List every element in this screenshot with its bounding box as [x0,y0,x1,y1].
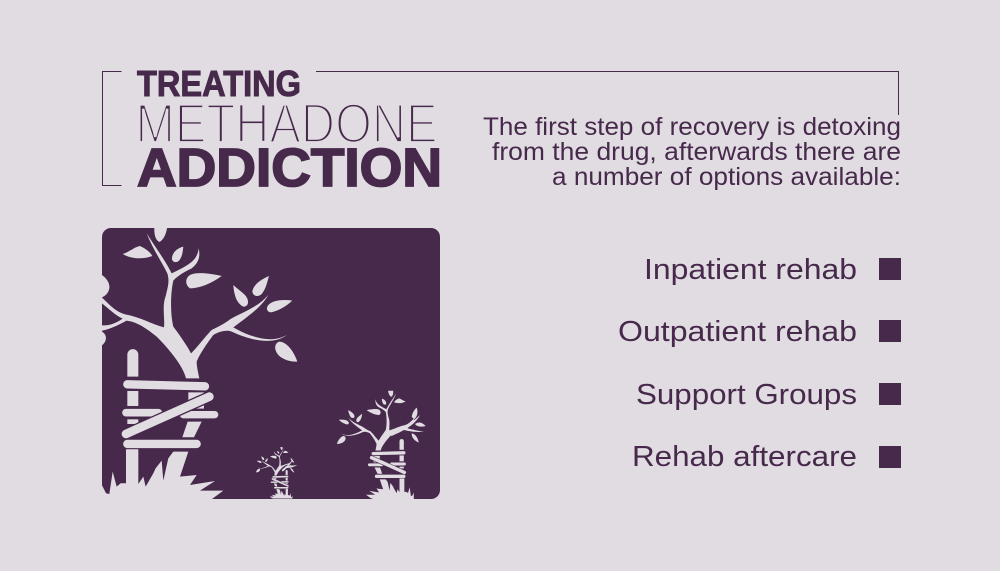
icon: small tree with fence [256,447,297,499]
option: outpatient rehab: Outpatient rehab [618,316,857,348]
title: ADDICTION [137,138,442,198]
option: inpatient rehab: Inpatient rehab [644,254,857,286]
options list [618,254,901,473]
icon: large tree with fence [102,227,297,502]
intro paragraph: a number of options available: [552,163,901,191]
title: TREATING [137,63,301,104]
title: METHADONE [136,91,438,154]
intro paragraph: The first step of recovery is detoxing [483,113,901,141]
intro paragraph: from the drug, afterwards there are [492,138,901,166]
title [136,63,442,198]
option: rehab aftercare: Rehab aftercare [632,441,857,473]
panel: tree illustration [102,227,440,502]
intro paragraph [483,113,901,191]
title bracket frame [102,72,898,186]
icon: medium tree with fence [337,391,426,499]
option: support groups: Support Groups [636,379,857,411]
